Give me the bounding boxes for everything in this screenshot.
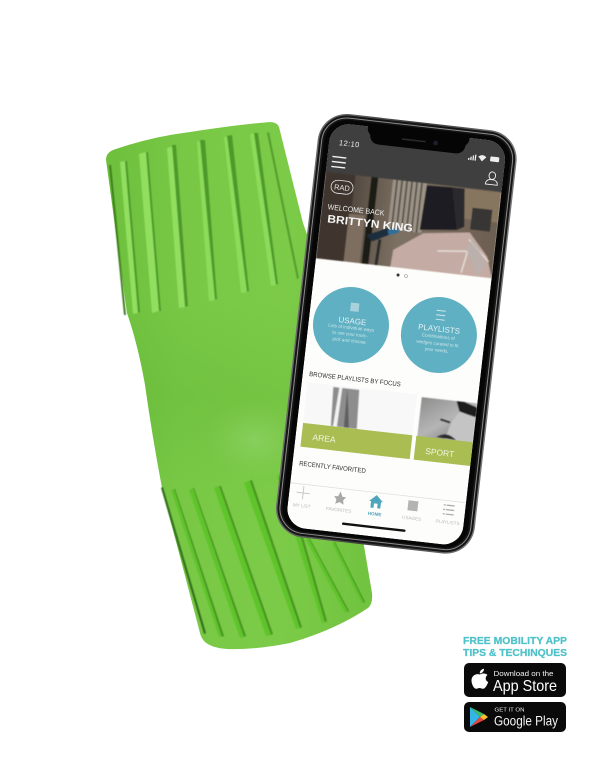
profile icon (485, 171, 499, 185)
screen (285, 122, 507, 547)
tab: playlists: PLAYLISTS (435, 518, 460, 526)
promo heading: FREE MOBILITY APP (463, 635, 567, 647)
tab: home: HOME (368, 511, 382, 517)
welcome banner photo (316, 172, 502, 278)
google play badge: GET IT ON (494, 708, 524, 714)
home indicator (342, 522, 406, 532)
promo heading: TIPS & TECHINQUES (463, 647, 567, 659)
carousel dots (396, 273, 408, 278)
usage circle: to use your tools - (332, 330, 369, 339)
promo heading (463, 635, 567, 659)
tab: playlists (436, 504, 460, 526)
playlists circle: PLAYLISTS (418, 322, 461, 336)
app store badge: App Store (493, 678, 557, 695)
green massage roller (100, 122, 372, 649)
RAD logo (330, 180, 354, 195)
usage circle (313, 287, 389, 363)
sport card (414, 397, 477, 466)
user name: BRITTYN KING (327, 213, 413, 235)
playlists icon (436, 310, 446, 320)
usage circle: pick and choose. (332, 336, 367, 345)
status bar (339, 140, 500, 162)
google play badge (464, 702, 566, 732)
tab bar divider (290, 482, 466, 503)
playlists circle: Combinations of (421, 332, 456, 341)
sport card: SPORT (425, 446, 455, 459)
highlight on waist (205, 402, 305, 478)
tab: favorites: FAVORITES (326, 506, 352, 514)
playlists circle (400, 297, 477, 373)
apple icon (472, 669, 488, 689)
tab: usages: USAGES (402, 515, 421, 522)
lower grooves (161, 474, 365, 638)
leg photo (329, 387, 361, 429)
smartphone (273, 111, 520, 557)
usage icon (350, 302, 359, 312)
app promo (463, 635, 567, 732)
usage circle: Lots of individual ways (328, 323, 375, 333)
welcome back text: WELCOME BACK (327, 202, 385, 218)
playlists circle: your needs. (424, 346, 449, 354)
tab: usages (402, 500, 421, 521)
hamburger menu icon (331, 156, 346, 168)
playlists circle: wedges curated to fit (416, 339, 460, 349)
tab: favorites (326, 492, 352, 513)
tab: my list: MY LIST (293, 502, 311, 509)
recently favorited heading: RECENTLY FAVORITED (299, 460, 366, 475)
area card (300, 382, 417, 459)
cyclist photo (417, 397, 477, 443)
play icon (470, 707, 488, 727)
app store badge (464, 663, 566, 697)
waist shading (145, 386, 148, 400)
browse heading: BROWSE PLAYLISTS BY FOCUS (309, 371, 402, 388)
upper grooves (109, 132, 299, 315)
tab: home (368, 495, 383, 516)
wifi icon (478, 155, 486, 162)
notch (366, 124, 470, 155)
app store badge: Download on the (494, 669, 554, 678)
battery icon (490, 156, 499, 162)
signal icon (468, 154, 476, 161)
RAD logo: RAD (334, 182, 351, 193)
phone frame (273, 111, 520, 557)
area card: AREA (312, 432, 336, 445)
google play badge: Google Play (494, 714, 558, 728)
dark app header (326, 122, 507, 193)
speaker and camera (402, 137, 438, 146)
roller body (106, 122, 372, 649)
time: 12:10 (339, 138, 360, 149)
usage circle: USAGE (338, 315, 367, 327)
tab: my list (293, 486, 311, 508)
